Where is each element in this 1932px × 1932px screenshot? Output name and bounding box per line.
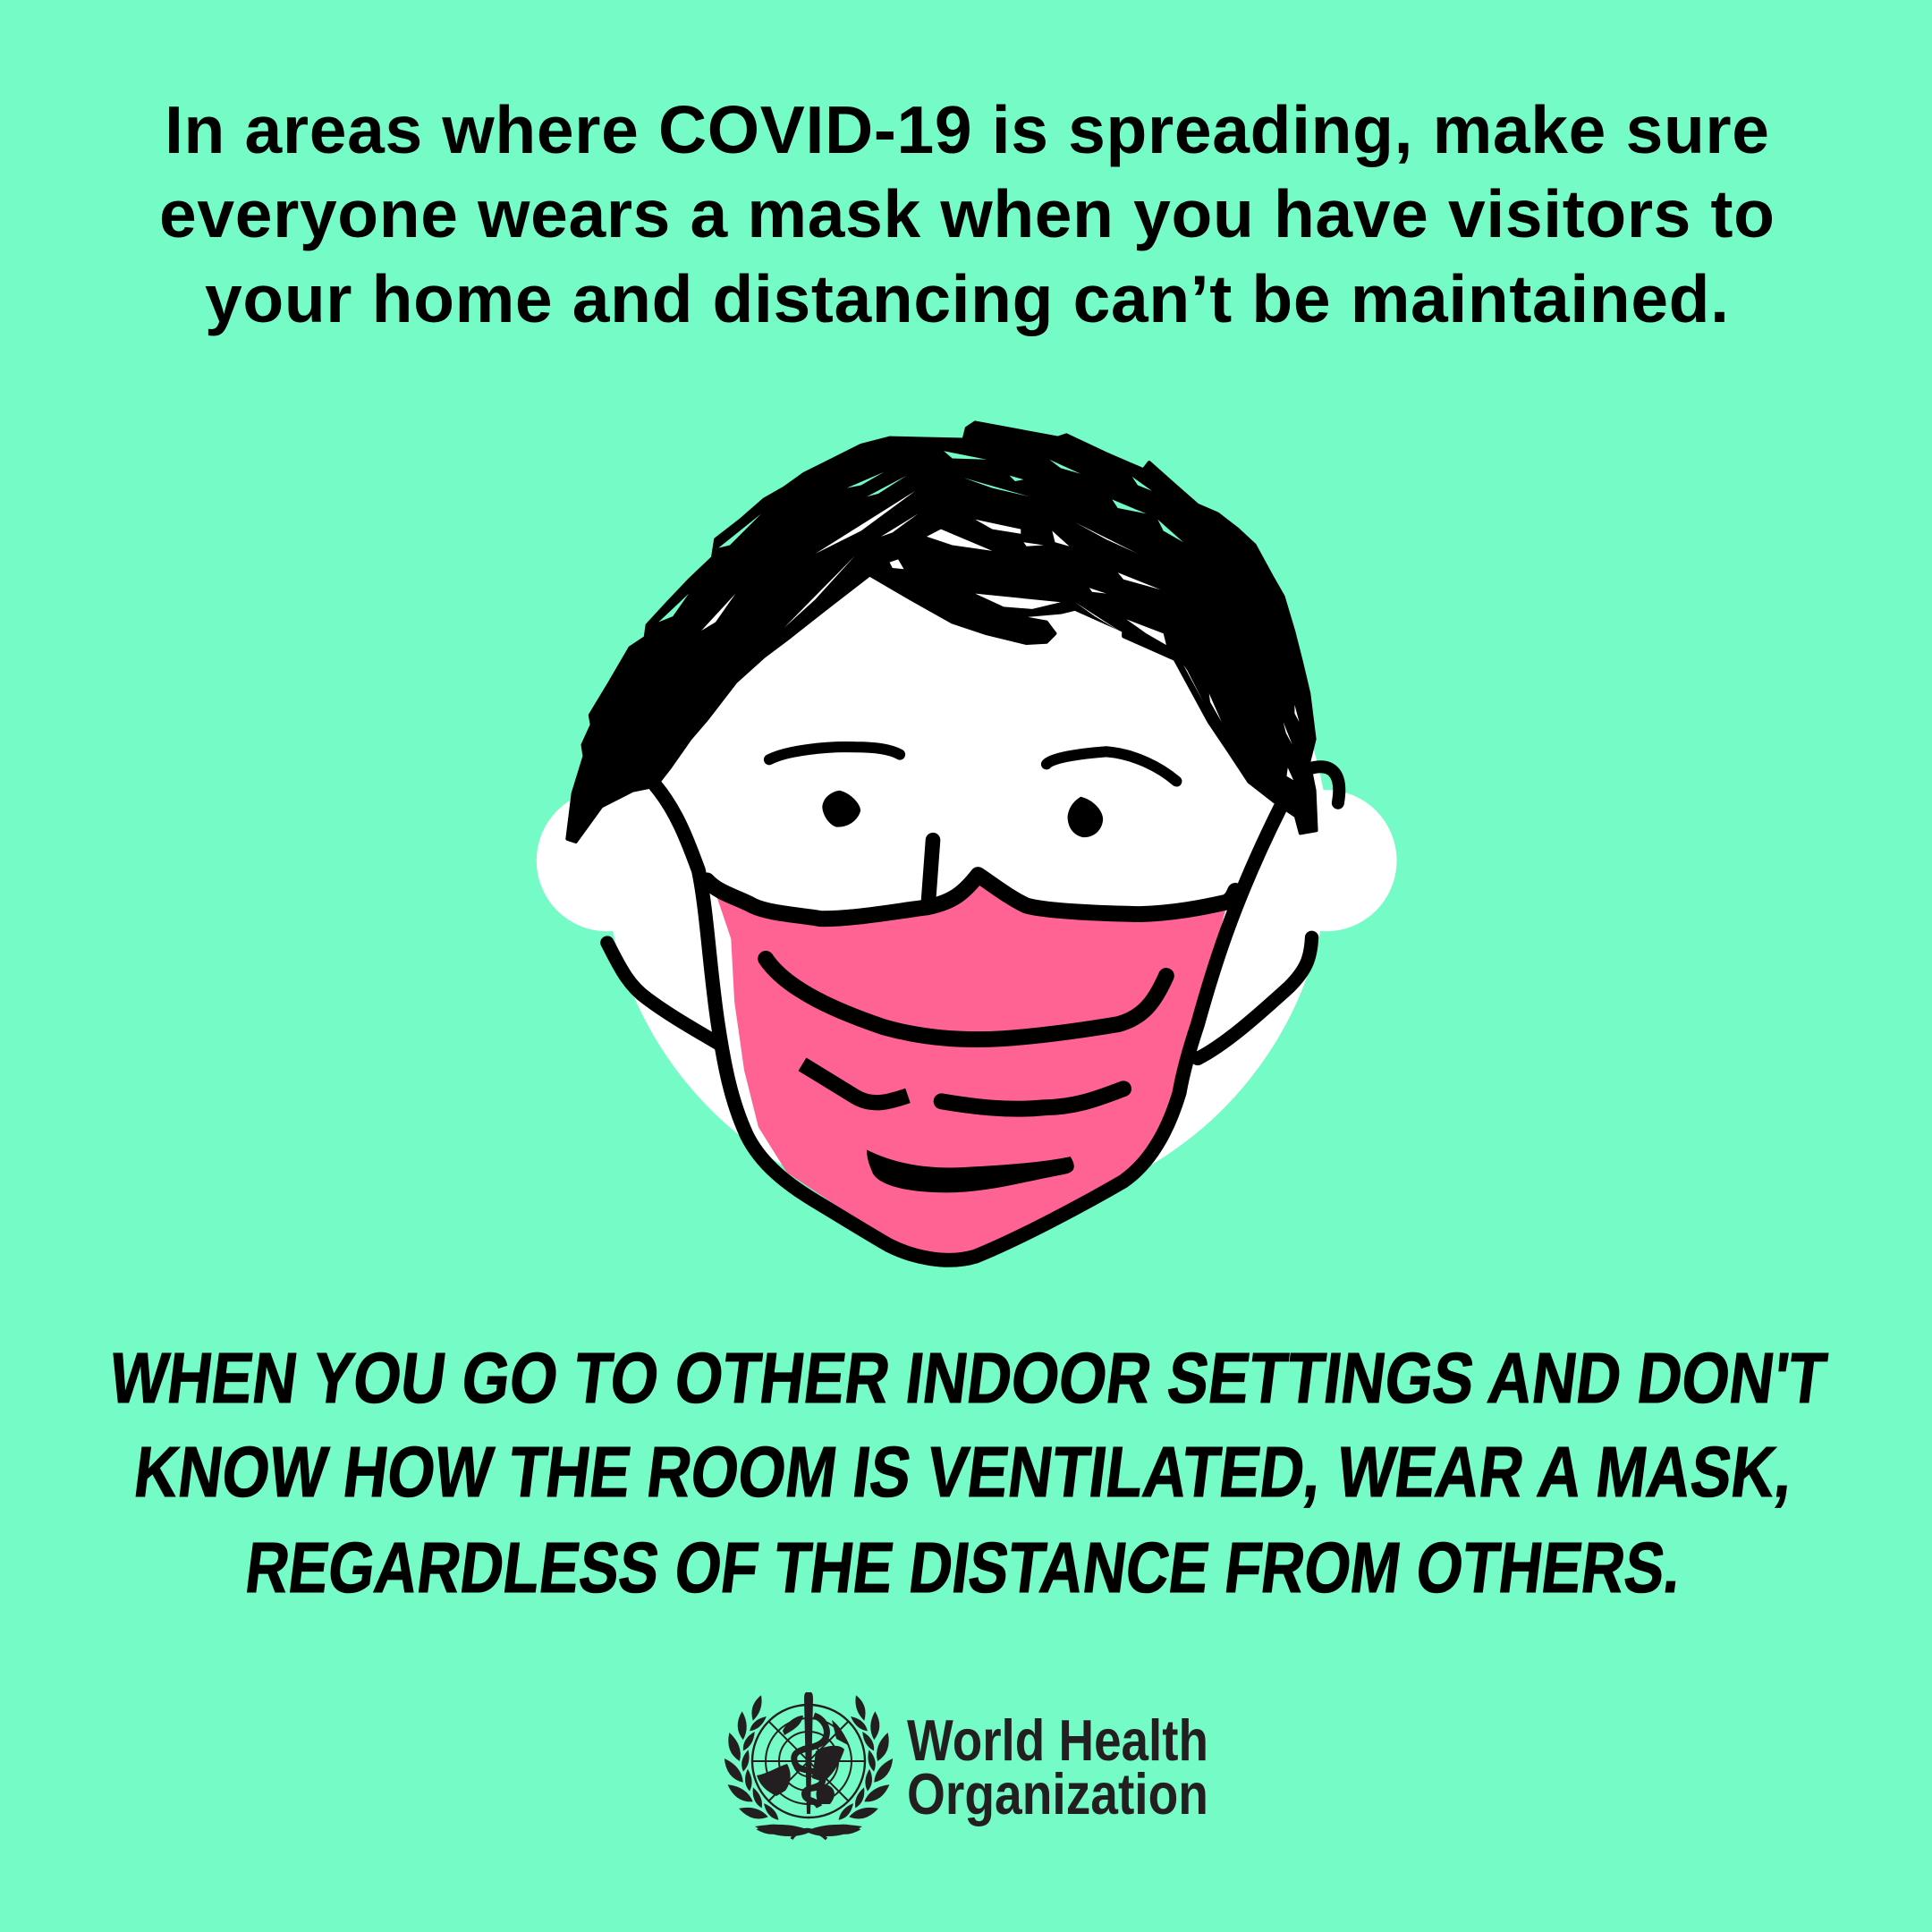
mask fill: [716, 882, 1226, 1261]
text block: brush lettering message: REGARDLESS OF THE DISTANCE FROM OTHERS.: [242, 1528, 1686, 1608]
text block: brush lettering message: [106, 1338, 1831, 1608]
eyebrows: [769, 747, 1176, 781]
logo wordmark: Organization: [907, 1761, 1208, 1826]
illustration: face wearing a pink mask: [537, 422, 1397, 1261]
mask outline and straps: [607, 786, 1312, 1260]
heading: top message: your home and distancing can’t be maintained.: [205, 261, 1729, 336]
eyes: [822, 791, 1103, 837]
hair: [567, 422, 1339, 842]
heading: top message: In areas where COVID-19 is spreading, make sure: [165, 92, 1769, 167]
mask pleats: [766, 959, 1166, 1192]
logo: World Health Organization: [720, 1692, 1208, 1839]
heading: top message: [159, 92, 1775, 336]
nose: [928, 840, 933, 902]
logo wordmark: [907, 1707, 1208, 1826]
icon: WHO emblem: [720, 1692, 897, 1839]
heading: top message: everyone wears a mask when you have visitors to: [159, 176, 1775, 251]
logo wordmark: World Health: [907, 1707, 1208, 1773]
head and ears: [537, 491, 1397, 1216]
